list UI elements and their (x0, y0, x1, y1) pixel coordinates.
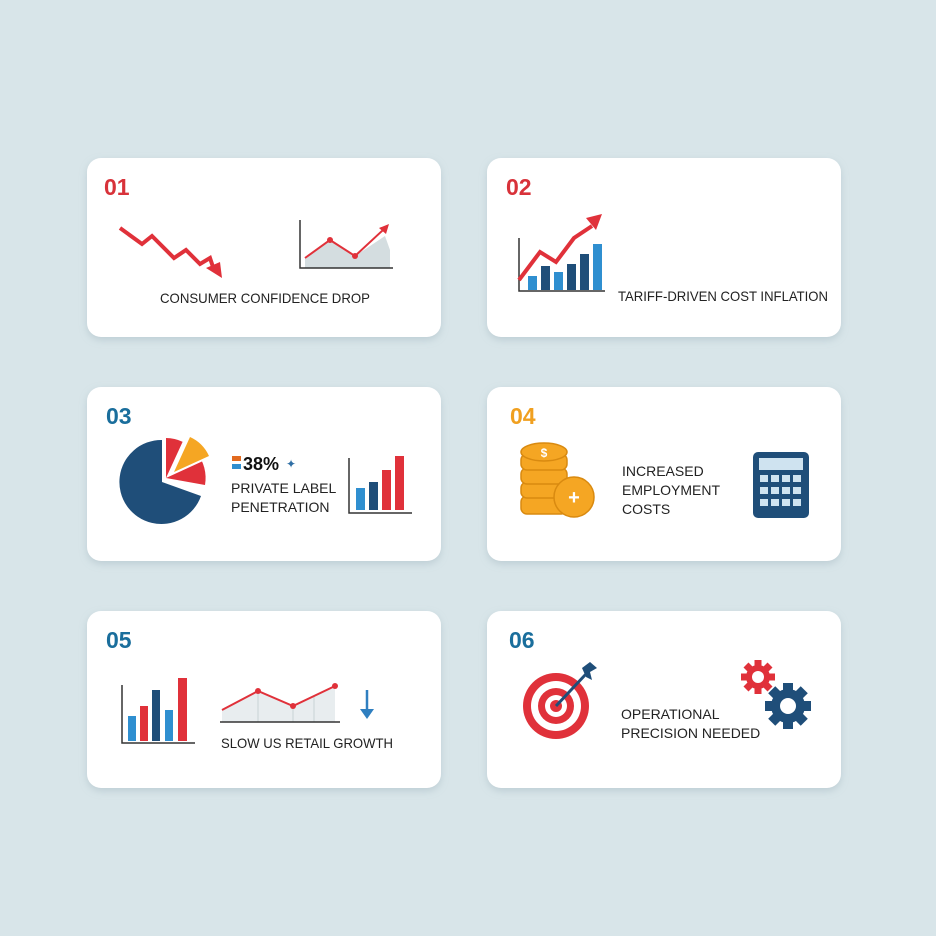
icon: coin stack: $ (541, 446, 548, 460)
number 01: 01 (104, 174, 130, 200)
panel: 02 tariff inflation (487, 158, 841, 337)
label: EMPLOYMENT (622, 482, 720, 498)
icon: calculator (753, 452, 809, 518)
number 06: 06 (509, 627, 535, 653)
icon: coin stack: + (568, 487, 580, 509)
panel: 06 operational precision (487, 611, 841, 788)
panel: 04 employment costs (487, 387, 841, 561)
icon: gears (741, 660, 811, 729)
number 03: 03 (106, 403, 132, 429)
label: PENETRATION (231, 499, 330, 515)
icon: down arrow (360, 690, 374, 719)
label: PRECISION NEEDED (621, 725, 760, 741)
icon: line chart (300, 220, 393, 268)
icon: bar chart with rising arrow (519, 214, 605, 291)
icon: pie chart (119, 437, 209, 524)
icon: line chart (220, 683, 340, 722)
stat 38% (232, 454, 296, 474)
label: OPERATIONAL (621, 706, 720, 722)
icon: bar chart (349, 456, 412, 513)
panel: 03 private label (87, 387, 441, 561)
number 02: 02 (506, 174, 532, 200)
panel: 01 consumer confidence (87, 158, 441, 337)
icon: coin stack (521, 443, 594, 517)
label: CONSUMER CONFIDENCE DROP (160, 290, 370, 306)
number 04: 04 (510, 403, 536, 429)
label: PRIVATE LABEL (231, 480, 337, 496)
label: TARIFF-DRIVEN COST INFLATION (618, 288, 828, 304)
label: INCREASED (622, 463, 704, 479)
label: SLOW US RETAIL GROWTH (221, 735, 393, 751)
panel: 05 retail growth (87, 611, 441, 788)
stat 38%: 38% (243, 454, 279, 474)
icon: target with dart (523, 662, 597, 739)
number 05: 05 (106, 627, 132, 653)
icon: bar chart (122, 678, 195, 743)
icon: falling zigzag arrow (120, 228, 222, 278)
stat 38%: ✦ (286, 457, 296, 471)
label: COSTS (622, 501, 670, 517)
